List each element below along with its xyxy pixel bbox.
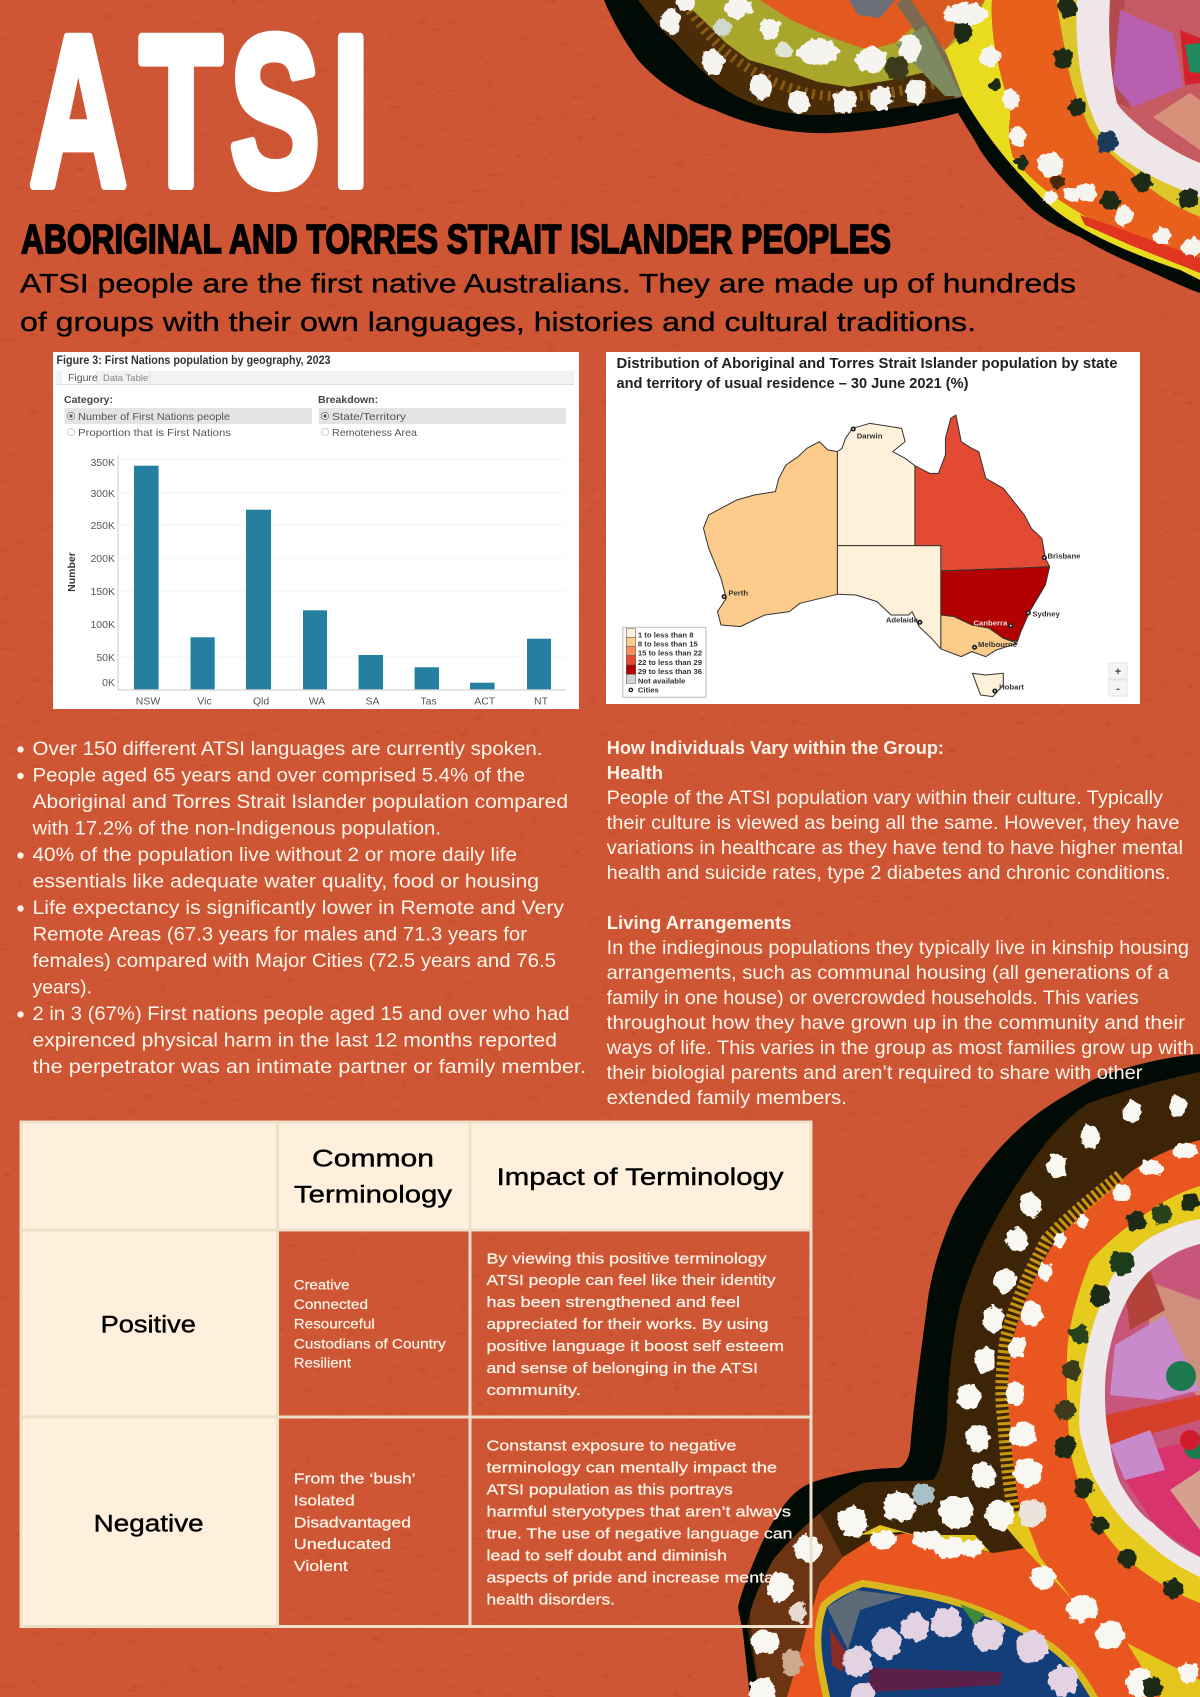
text block: how individuals vary: throughout how they have grown up in the community and their [607,1012,1186,1034]
negative terminology list [294,1470,416,1575]
text block: key statistics: years). [32,976,92,998]
chart axes: 50K [96,652,115,664]
header: common terminology [294,1146,452,1209]
text block: how individuals vary: How Individuals Vary within the Group: [607,737,944,758]
artwork: top right Aboriginal dot painting [604,0,1200,293]
panel: distribution map [606,352,1140,704]
map of Australia [703,415,1080,697]
table cream cells [21,1122,811,1627]
positive impact text: has been strengthened and feel [486,1294,740,1311]
text block: how individuals vary: Living Arrangements [607,912,792,933]
text block: key statistics: 2 in 3 (67%) First nations people aged 15 and over who had [32,1003,570,1025]
text block: how individuals vary [606,737,1194,1109]
negative terminology list: From the ‘bush’ [294,1470,416,1487]
text block: how individuals vary: health and suicide rates, type 2 diabetes and chronic conditions. [607,862,1170,884]
negative impact text: lead to self doubt and diminish [486,1547,727,1564]
positive impact text: By viewing this positive terminology [486,1250,767,1267]
negative impact text: true. The use of negative language can [486,1526,792,1543]
intro text: ATSI people are the first native Australians. They are made up of hundreds [20,269,1076,299]
text block: how individuals vary: Health [607,762,663,783]
map of Australia: Adelaide [886,615,918,624]
text block: key statistics: expirenced physical harm in the last 12 months reported [32,1030,557,1052]
text block: key statistics: People aged 65 years and over comprised 5.4% of the [32,764,525,786]
chart axes: 200K [90,553,115,565]
artwork: bottom right Aboriginal dot painting [738,1054,1200,1697]
text block: key statistics: 40% of the population live without 2 or more daily life [32,844,517,866]
text block: key statistics: Over 150 different ATSI languages are currently spoken. [32,738,542,760]
text block: how individuals vary: People of the ATSI population vary within their culture. Typically [607,787,1163,809]
positive terminology list: Custodians of Country [294,1336,446,1351]
map title: Distribution of Aboriginal and Torres Strait Islander population by state [616,355,1118,372]
chart filter: breakdown [318,394,566,439]
chart tabs: Figure [68,372,98,384]
positive terminology list: Resourceful [294,1317,375,1332]
negative impact text [486,1438,792,1608]
positive impact text: ATSI people can feel like their identity [486,1272,776,1289]
map of Australia: Perth [728,589,748,598]
chart filter: category: Category: [64,394,113,406]
negative impact text: Constanst exposure to negative [486,1438,736,1455]
negative impact text: harmful steryotypes that aren’t always [486,1504,791,1521]
chart axes: Number [66,552,78,592]
chart tabs: Data Table [103,373,148,384]
table: terminology [21,1122,811,1627]
map of Australia: Darwin [857,432,883,440]
negative terminology list: Disadvantaged [294,1514,411,1531]
text block: key statistics: the perpetrator was an intimate partner or family member. [32,1056,586,1078]
map legend: 29 to less than 36 [638,667,702,676]
state labels: ACT [474,695,496,707]
text block: how individuals vary: family in one house) or overcrowded households. This varies [607,987,1139,1009]
text block: key statistics [17,738,586,1078]
chart filter: breakdown: Breakdown: [318,394,378,406]
negative terminology list: Uneducated [294,1536,391,1553]
chart filter: breakdown: State/Territory [332,411,407,423]
text block: how individuals vary: ways of life. This varies in the group as most families grow up with [606,1037,1194,1059]
state labels: SA [365,695,380,707]
state labels: Vic [197,695,212,707]
map legend: 1 to less than 8 [638,631,694,640]
text block: how individuals vary: their biologial parents and aren’t required to share with other [607,1062,1143,1084]
bullets [17,746,24,1018]
negative terminology list: Violent [294,1558,349,1575]
positive impact text: community. [486,1382,581,1399]
negative impact text: terminology can mentally impact the [486,1460,777,1477]
state labels: NT [534,695,549,707]
positive impact text: appreciated for their works. By using [486,1316,768,1333]
chart filter: category [64,394,312,439]
positive impact text: and sense of belonging in the ATSI [486,1360,758,1377]
negative terminology list: Isolated [294,1492,355,1509]
chart axes: 150K [90,586,115,598]
text block: key statistics: Aboriginal and Torres Strait Islander population compared [32,791,568,813]
text block: key statistics: females) compared with Major Cities (72.5 years and 76.5 [32,950,556,972]
map legend [623,627,706,697]
text block: how individuals vary: arrangements, such as communal housing (all generations of a [607,962,1169,984]
state labels: Qld [253,695,269,707]
positive terminology list [294,1277,446,1371]
chart axes: 0K [102,677,115,689]
positive terminology list: Creative [294,1277,349,1292]
chart axes: 300K [90,488,115,500]
state labels: WA [309,695,325,707]
chart filter: category: Proportion that is First Nations [78,427,231,439]
map zoom controls: - [1116,683,1120,695]
chart tabs [56,371,574,385]
map legend: 8 to less than 15 [638,640,698,649]
heading: full name: ABORIGINAL AND TORRES STRAIT ISLANDER PEOPLES [21,216,891,262]
map legend: 15 to less than 22 [638,649,702,658]
map title [616,355,1118,392]
negative impact text: aspects of pride and increase mental [486,1569,778,1586]
state labels: NSW [136,695,160,707]
map of Australia: Brisbane [1047,551,1080,560]
positive terminology list: Connected [294,1297,368,1312]
row label: positive: Positive [101,1312,196,1339]
row label: negative: Negative [94,1511,204,1538]
map title: and territory of usual residence – 30 June 2021 (%) [616,375,968,392]
chart axes: 350K [90,457,115,469]
positive impact text: positive language it boost self esteem [486,1338,784,1355]
chart filter: breakdown: Remoteness Area [332,427,417,439]
positive impact text [486,1250,784,1399]
positive terminology list: Resilient [294,1356,351,1371]
bars [134,466,551,689]
chart title: Figure 3: First Nations population by geography, 2023 [56,355,330,367]
text block: how individuals vary: variations in healthcare as they have tend to have higher mental [607,837,1183,859]
text block: how individuals vary: In the indieginous populations they typically live in kinship housing [607,937,1189,959]
chart axes: 100K [90,619,115,631]
text block: key statistics: Life expectancy is significantly lower in Remote and Very [32,897,564,919]
map legend: Cities [638,685,659,694]
negative impact text: health disorders. [486,1591,615,1608]
text block: key statistics: with 17.2% of the non-Indigenous population. [31,818,441,840]
text block: key statistics: Remote Areas (67.3 years for males and 71.3 years for [32,924,528,946]
intro text [20,269,1076,337]
text block: how individuals vary: extended family members. [607,1087,847,1109]
state labels: Tas [420,695,437,707]
header: common terminology: Common [312,1146,434,1173]
map of Australia: Canberra [973,619,1008,628]
state labels [136,695,549,707]
map zoom controls: + [1115,666,1121,678]
text block: how individuals vary: their culture is viewed as being all the same. However, they have [607,812,1180,834]
header: common terminology: Terminology [294,1182,452,1209]
negative impact text: ATSI population as this portrays [486,1482,733,1499]
text block: key statistics: essentials like adequate water quality, food or housing [32,870,539,892]
table grid [21,1122,811,1626]
map legend: Not available [638,676,685,685]
map legend: 22 to less than 29 [638,658,702,667]
chart axes: 250K [90,520,115,532]
map zoom controls [1109,663,1127,696]
chart filter: category: Number of First Nations people [78,411,230,423]
header: impact of terminology: Impact of Terminology [497,1164,784,1191]
map of Australia: Hobart [999,682,1024,691]
chart axes [66,455,566,690]
panel: bar chart First Nations population [53,352,579,709]
map of Australia: Melbourne [978,640,1017,649]
intro text: of groups with their own languages, histories and cultural traditions. [20,307,976,337]
map of Australia: Sydney [1032,610,1061,619]
